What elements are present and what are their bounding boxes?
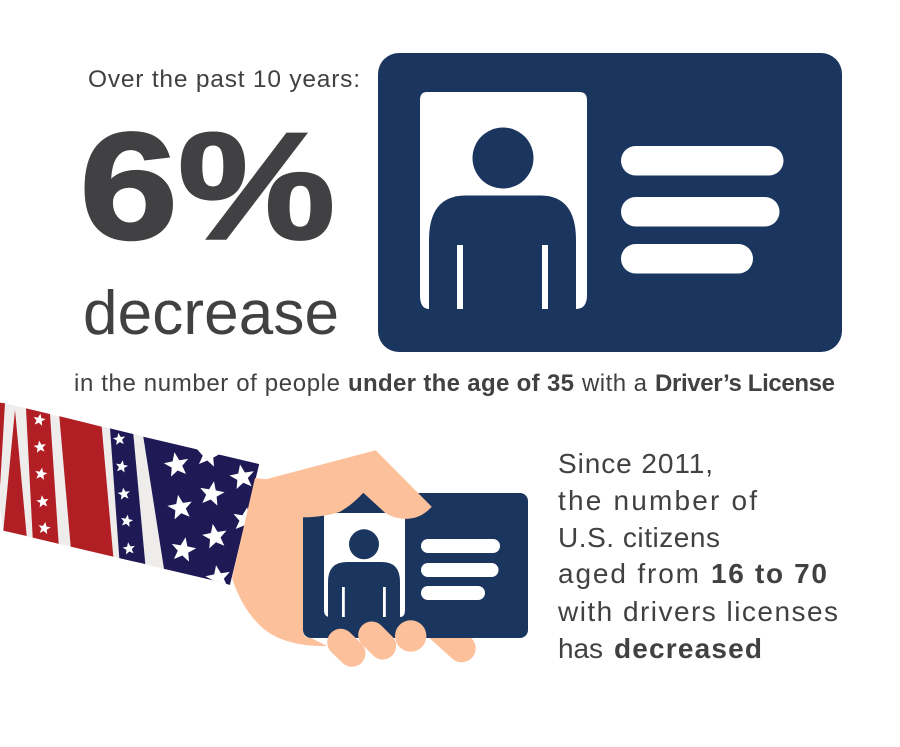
big statistic: 6%: 6% <box>80 101 335 271</box>
side note text: has <box>558 633 603 664</box>
side note text: with drivers licenses <box>557 596 838 627</box>
side note text: Since 2011, <box>558 448 713 479</box>
description line: under the age of 35 <box>348 370 574 397</box>
illustration: flag sleeve <box>0 402 259 591</box>
decrease label: decrease <box>83 279 339 348</box>
side note text: decreased <box>614 633 762 664</box>
side note text: aged from <box>558 558 699 589</box>
description line: with a <box>581 370 648 397</box>
description line: Driver’s License <box>655 370 835 397</box>
side note text: 16 to 70 <box>711 558 827 589</box>
side note text: U.S. citizens <box>558 522 720 553</box>
side note text: the number of <box>558 485 757 516</box>
intro text: Over the past 10 years: <box>88 66 360 93</box>
description line <box>74 370 835 397</box>
side note text <box>557 448 838 664</box>
illustration: hand holding small ID card <box>232 450 528 653</box>
description line: in the number of people <box>74 370 340 397</box>
icon: large ID card <box>378 53 842 352</box>
